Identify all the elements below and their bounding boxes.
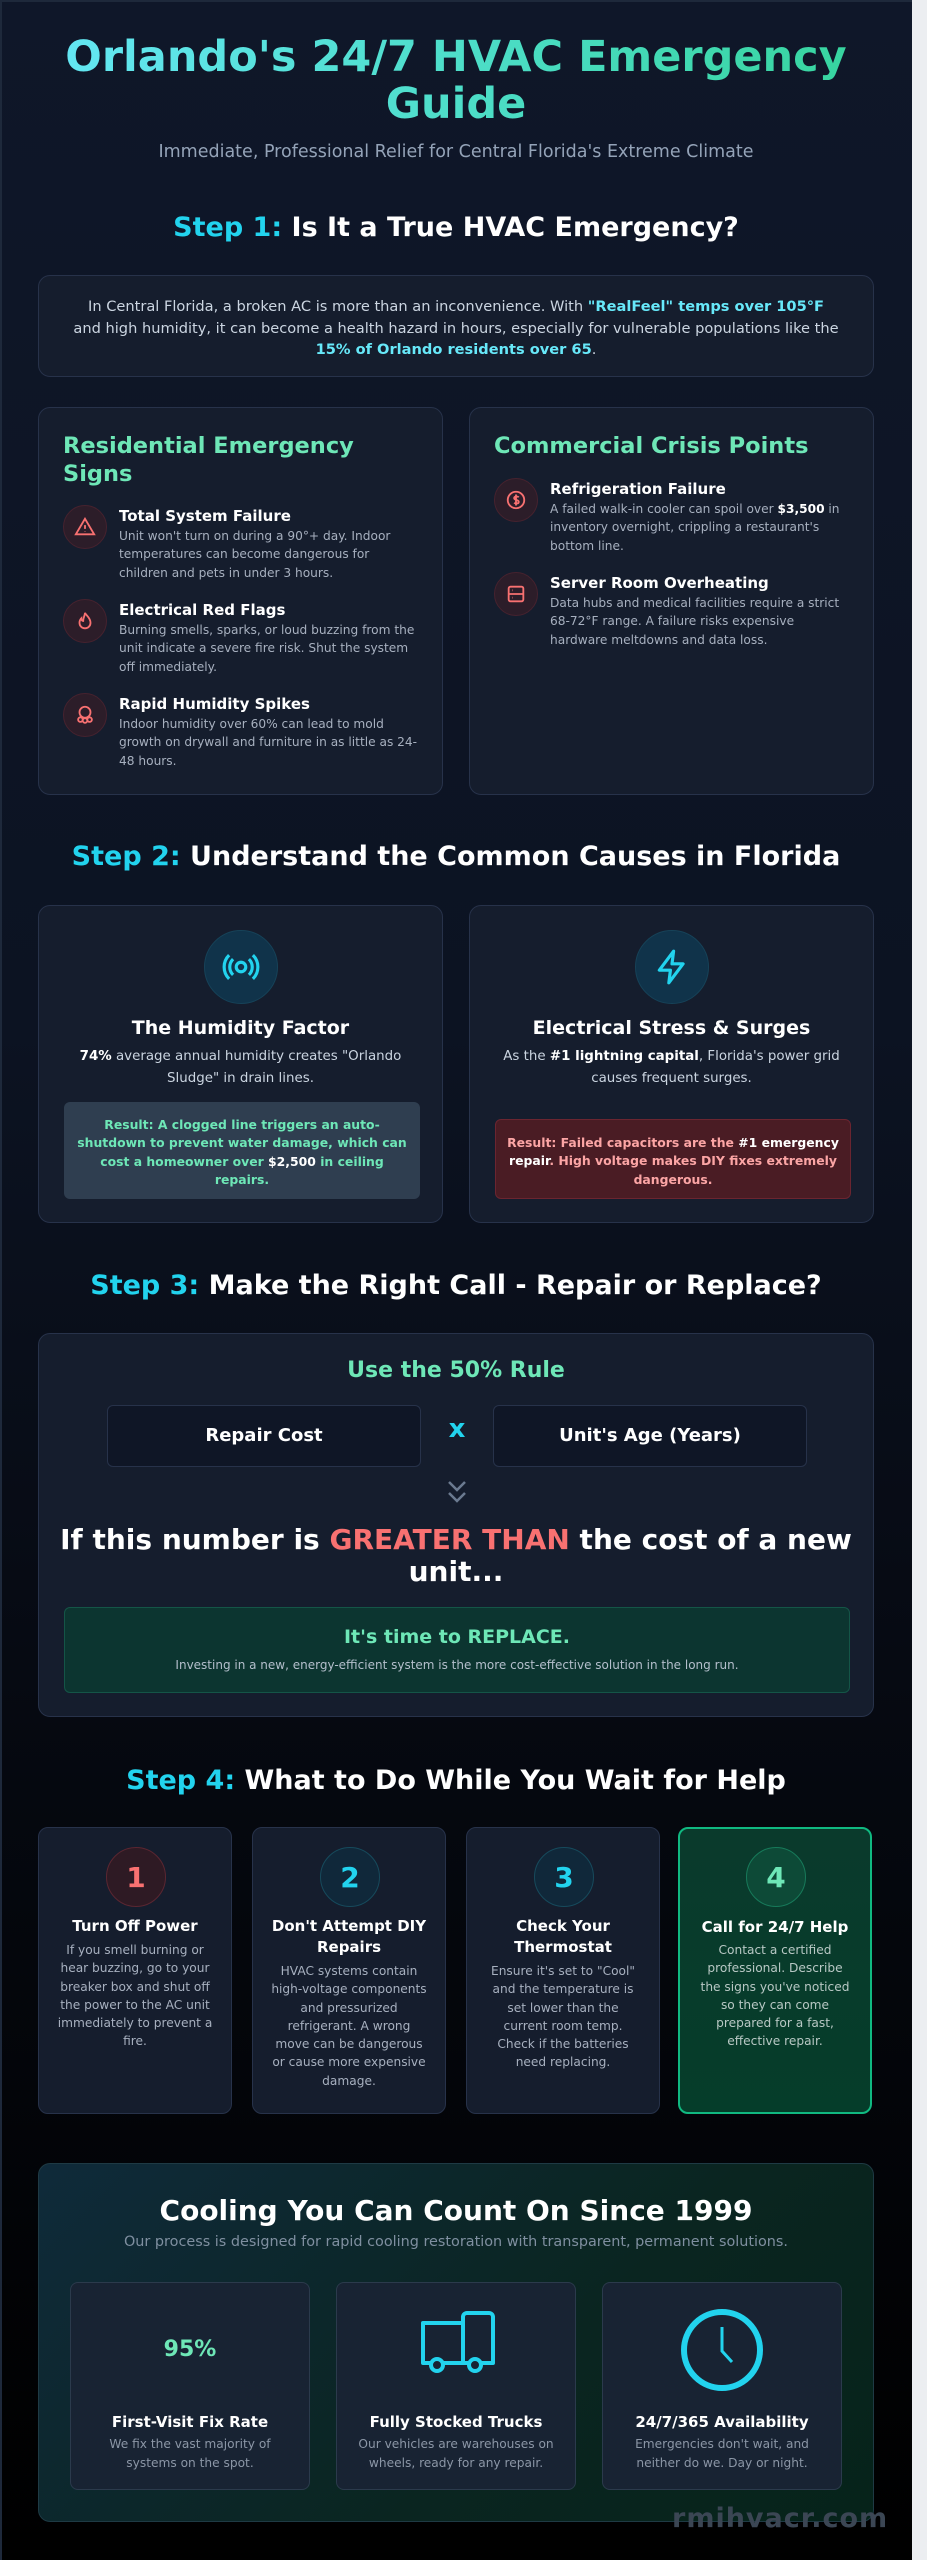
card: step 3 thermostat: Check Your Thermostat bbox=[514, 1917, 612, 1956]
title bbox=[0, 34, 912, 128]
card: step 2 no DIY: 2 bbox=[340, 1860, 360, 1894]
icon: clock bbox=[681, 2309, 763, 2391]
icon: warning bbox=[63, 505, 107, 549]
panel: 50% rule bbox=[38, 1333, 874, 1717]
card: step 3 thermostat bbox=[466, 1827, 660, 2114]
card: step 1 turn off power bbox=[38, 1827, 232, 2114]
intro box: and high humidity, it can become a health hazard in hours, especially for vulnerable populations like the 15% of Orlando residents over 65. bbox=[73, 320, 839, 358]
result box: Result: Failed capacitors are the #1 emergency repair. High voltage makes DIY fixes extremely dangerous. bbox=[507, 1135, 839, 1187]
item: electrical red flags: Electrical Red Flags bbox=[119, 601, 285, 619]
icon: humidity bbox=[204, 930, 278, 1004]
panel: commercial crisis points bbox=[469, 407, 874, 795]
item: total system failure: Unit won't turn on during a 90°+ day. Indoor temperatures can become dangerous for children and pets in under 3 hours. bbox=[119, 529, 390, 580]
stat: availability: 24/7/365 Availability bbox=[635, 2413, 809, 2431]
stat: availability bbox=[602, 2282, 842, 2490]
item: humidity spikes bbox=[63, 693, 417, 768]
card: step 3 thermostat: 3 bbox=[554, 1860, 574, 1894]
box: unit age bbox=[493, 1405, 807, 1467]
panel: electrical stress bbox=[469, 905, 874, 1223]
heading: residential: Residential Emergency bbox=[63, 433, 354, 459]
card: step 2 no DIY bbox=[252, 1827, 446, 2114]
heading: Cooling You Can Count On Since 1999 bbox=[160, 2194, 752, 2227]
intro box: In Central Florida, a broken AC is more than an inconvenience. With "RealFeel" temps over 105°F bbox=[88, 298, 824, 315]
item: server room: Server Room Overheating bbox=[550, 574, 769, 592]
title: Orlando's 24/7 HVAC Emergency bbox=[65, 32, 847, 82]
icon: dollar bbox=[494, 478, 538, 522]
rule heading: Use the 50% Rule bbox=[347, 1358, 565, 1383]
subtitle: Immediate, Professional Relief for Central Florida's Extreme Climate bbox=[158, 142, 754, 162]
card: step 4 call for help bbox=[678, 1827, 872, 2114]
description: 74% average annual humidity creates "Orlando Sludge" in drain lines. bbox=[80, 1049, 401, 1086]
replace box: Investing in a new, energy-efficient system is the more cost-effective solution in the long run. bbox=[175, 1658, 739, 1672]
box: unit age: Unit's Age (Years) bbox=[559, 1425, 741, 1446]
subheading: Our process is designed for rapid cooling restoration with transparent, permanent solutions. bbox=[124, 2234, 788, 2250]
title: Guide bbox=[386, 79, 526, 129]
panel: residential emergency signs bbox=[38, 407, 443, 795]
heading: step 3: Step 3: Make the Right Call - Repair or Replace? bbox=[90, 1270, 822, 1301]
card: step 4 call for help: 4 bbox=[766, 1860, 786, 1894]
description: As the #1 lightning capital, Florida's power grid causes frequent surges. bbox=[503, 1049, 840, 1086]
panel: cooling you can count on bbox=[38, 2163, 874, 2522]
card: step 1 turn off power: Turn Off Power bbox=[72, 1917, 198, 1935]
condition text: If this number is GREATER THAN the cost of a new unit... bbox=[60, 1523, 852, 1588]
card: step 2 no DIY: Don't Attempt DIY Repairs bbox=[272, 1917, 426, 1956]
card: step 4 call for help: Call for 24/7 Help bbox=[702, 1918, 848, 1936]
card: step 4 call for help: Contact a certified professional. Describe the signs you've noticed so they can come prepared for a fast, effective repair. bbox=[701, 1943, 849, 2048]
title: The Humidity Factor bbox=[132, 1017, 349, 1039]
panel: humidity factor bbox=[38, 905, 443, 1223]
intro box bbox=[38, 275, 874, 377]
card: step 1 turn off power: 1 bbox=[126, 1860, 146, 1894]
card: step 2 no DIY: HVAC systems contain high-voltage components and pressurized refrigerant. A wrong move can be dangerous or cause more expensive damage. bbox=[271, 1964, 427, 2088]
replace box bbox=[64, 1607, 850, 1693]
stat number: 95% bbox=[164, 2337, 216, 2362]
icon: lightning bbox=[635, 930, 709, 1004]
arrow: chevrons down bbox=[448, 1481, 466, 1503]
stat: trucks bbox=[336, 2282, 576, 2490]
result box bbox=[64, 1102, 420, 1199]
item: refrigeration failure bbox=[494, 478, 840, 553]
heading: residential: Signs bbox=[63, 461, 132, 487]
stat: first-visit fix bbox=[70, 2282, 310, 2490]
item: electrical red flags bbox=[63, 599, 414, 674]
result box bbox=[495, 1119, 851, 1199]
item: refrigeration failure: Refrigeration Failure bbox=[550, 480, 726, 498]
item: refrigeration failure: A failed walk-in cooler can spoil over $3,500 in inventory overnight, crippling a restaurant's bottom line. bbox=[550, 502, 840, 553]
box: repair cost bbox=[107, 1405, 421, 1467]
heading: step 1: Step 1: Is It a True HVAC Emergency? bbox=[173, 212, 739, 243]
stat: first-visit fix: We fix the vast majority of systems on the spot. bbox=[109, 2437, 271, 2470]
item: electrical red flags: Burning smells, sparks, or loud buzzing from the unit indicate a severe fire risk. Shut the system off immediately. bbox=[119, 623, 414, 674]
heading: residential bbox=[63, 433, 354, 487]
heading: step 2: Step 2: Understand the Common Causes in Florida bbox=[72, 841, 840, 872]
stat: availability: Emergencies don't wait, and neither do we. Day or night. bbox=[635, 2437, 809, 2470]
multiply sign: x bbox=[449, 1414, 465, 1444]
stat: first-visit fix: First-Visit Fix Rate bbox=[112, 2413, 268, 2431]
item: server room bbox=[494, 572, 839, 647]
card: step 1 turn off power: If you smell burning or hear buzzing, go to your breaker box and shut off the power to the AC unit immediately to prevent a fire. bbox=[58, 1943, 212, 2048]
item: humidity spikes: Rapid Humidity Spikes bbox=[119, 695, 310, 713]
watermark: rmihvacr.com bbox=[672, 2503, 888, 2534]
item: server room: Data hubs and medical facilities require a strict 68-72°F range. A failure risks expensive hardware meltdowns and data loss. bbox=[550, 596, 839, 647]
box: repair cost: Repair Cost bbox=[205, 1425, 323, 1446]
item: humidity spikes: Indoor humidity over 60% can lead to mold growth on drywall and furniture in as little as 24-48 hours. bbox=[119, 717, 417, 768]
icon: truck bbox=[421, 2311, 495, 2373]
stat: trucks: Our vehicles are warehouses on wheels, ready for any repair. bbox=[358, 2437, 554, 2470]
card: step 3 thermostat: Ensure it's set to "Cool" and the temperature is set lower than the current room temp. Check if the batteries need replacing. bbox=[491, 1964, 635, 2069]
heading: commercial: Commercial Crisis Points bbox=[494, 433, 808, 459]
replace box: It's time to REPLACE. bbox=[344, 1626, 570, 1648]
stat: trucks: Fully Stocked Trucks bbox=[370, 2413, 542, 2431]
icon: server bbox=[494, 572, 538, 616]
item: total system failure bbox=[63, 505, 390, 580]
heading: step 4: Step 4: What to Do While You Wait for Help bbox=[126, 1765, 786, 1796]
icon: mold bbox=[63, 693, 107, 737]
title: Electrical Stress & Surges bbox=[533, 1017, 810, 1039]
result box: Result: A clogged line triggers an auto-shutdown to prevent water damage, which can cost a homeowner over $2,500 in ceiling repairs. bbox=[77, 1117, 407, 1187]
icon: fire bbox=[63, 599, 107, 643]
item: total system failure: Total System Failure bbox=[119, 507, 291, 525]
